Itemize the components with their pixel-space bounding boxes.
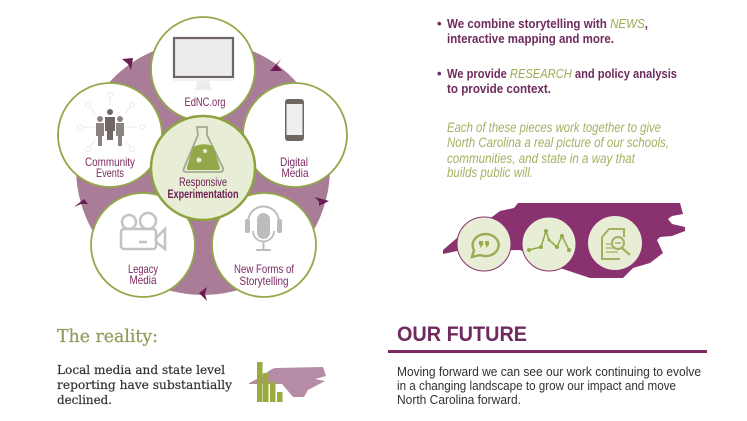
divider rule [388, 350, 707, 353]
label: Legacy [128, 262, 158, 276]
node: Legacy Media: Media [130, 273, 157, 287]
map: North Carolina [443, 203, 685, 278]
label: New Forms of [234, 262, 295, 276]
icon: line chart [522, 217, 576, 271]
node: New Forms of Storytelling [212, 193, 316, 297]
text block: research bullet: We provide RESEARCH and policy analysis [447, 66, 677, 81]
text block: news bullet [437, 16, 648, 46]
node: Legacy Media [91, 193, 195, 297]
chart: declining bars over small map [249, 362, 326, 402]
label: Community [85, 155, 135, 169]
arrow: left [74, 199, 88, 207]
icon: speech bubble [457, 217, 511, 271]
node: New Forms of Storytelling: Storytelling [240, 274, 288, 288]
text block: italic summary: builds public will. [447, 165, 533, 180]
icon: flask [183, 127, 223, 172]
text block: italic summary: Each of these pieces work together to give [447, 120, 661, 135]
icon: video camera [121, 213, 165, 249]
node: Responsive Experimentation: Experimentation [168, 187, 238, 201]
node: Community Events [58, 83, 162, 187]
text block: reality body: Local media and state level [57, 362, 225, 377]
panel: North Carolina map with icons [443, 203, 685, 278]
text block: research bullet: to provide context. [447, 81, 551, 96]
icon: document with magnifier [588, 216, 642, 270]
node: Digital Media: Media [282, 166, 309, 180]
arrow: top right [270, 59, 282, 71]
icon: people network [78, 92, 144, 152]
text block: italic summary: communities, and state in a way that [447, 151, 636, 166]
heading: The reality: The reality: [57, 326, 158, 347]
text block: reality body [57, 362, 233, 407]
text block: news bullet: interactive mapping and more. [447, 31, 614, 46]
map: small North Carolina [249, 367, 326, 397]
purple ring background [76, 41, 330, 295]
arrow: top left [122, 58, 133, 70]
text block: future body: Moving forward we can see our work continuing to evolve [397, 364, 701, 379]
text block: future body: in a changing landscape to grow our impact and move [397, 378, 676, 393]
icon: microphone with headphones [245, 206, 282, 251]
text block: research bullet: • [437, 66, 442, 81]
text block: news bullet: We combine storytelling with NEWS, [447, 16, 648, 31]
label: Responsive [179, 175, 227, 189]
node: Community Events: Events [96, 166, 124, 180]
text block: future body: North Carolina forward. [397, 392, 521, 407]
node: Digital Media [243, 83, 347, 187]
text block: italic summary [447, 120, 669, 180]
arrow: bottom [199, 287, 207, 301]
arrow: right [315, 197, 329, 206]
text block: reality body: declined. [57, 392, 112, 407]
bars [257, 362, 282, 402]
icon: monitor [173, 38, 234, 90]
node: EdNC.org [151, 17, 255, 121]
icon: phone [285, 99, 304, 141]
label: Digital [280, 155, 308, 169]
text block: news bullet: • [437, 16, 442, 31]
text block: italic summary: North Carolina a real picture of our schools, [447, 135, 669, 150]
label: EdNC.org [184, 95, 226, 109]
node: Responsive Experimentation [151, 116, 255, 220]
text block: future body [397, 364, 701, 407]
panel: cycle diagram [58, 17, 347, 301]
heading: Our future: OUR FUTURE [397, 323, 527, 346]
text block: research bullet [437, 66, 677, 96]
text block: reality body: reporting have substantially [57, 377, 233, 392]
